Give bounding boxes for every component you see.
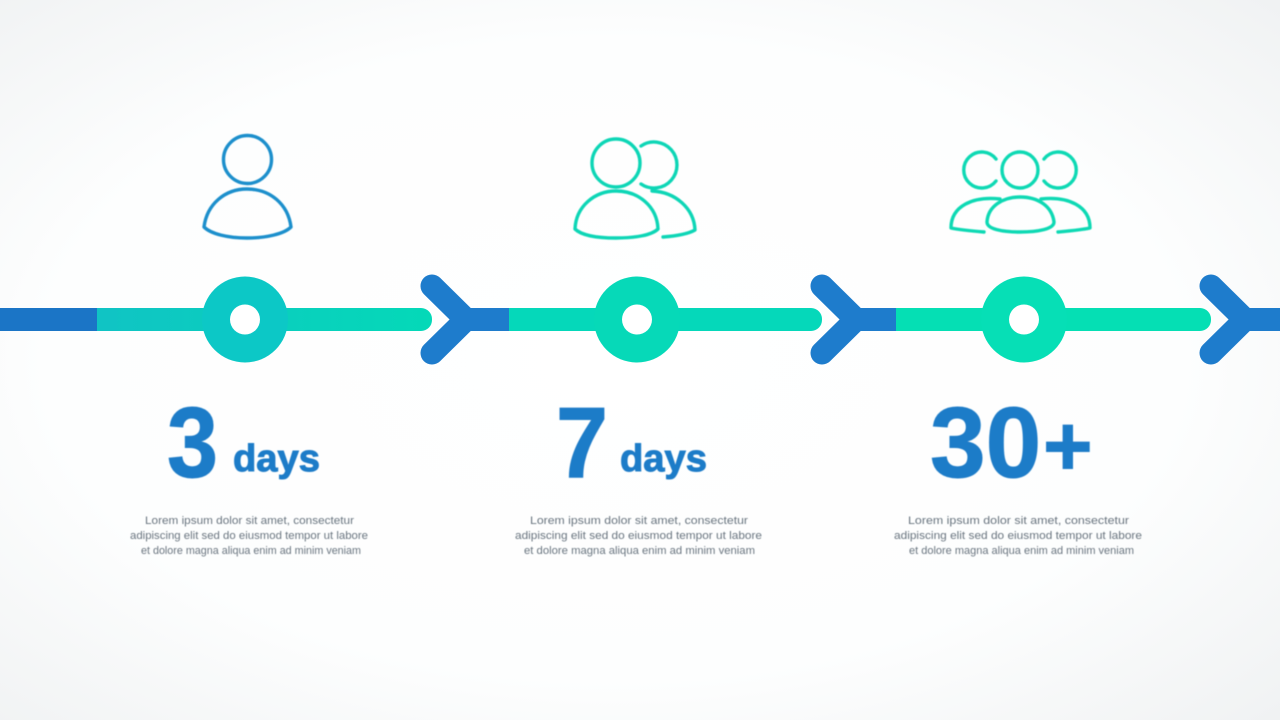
stat: 3 days: days — [233, 438, 320, 480]
text block one: Lorem ipsum dolor sit amet, consectetur — [145, 515, 354, 527]
stat: 3 days: 3 — [167, 387, 218, 499]
segment two — [509, 276, 822, 362]
text block two — [515, 515, 762, 557]
text block one — [130, 515, 368, 557]
text block three: Lorem ipsum dolor sit amet, consectetur — [908, 515, 1129, 527]
stat: 30+: + — [1043, 399, 1093, 494]
text block two: adipiscing elit sed do eiusmod tempor ut labore — [515, 530, 762, 542]
segment one — [97, 276, 432, 362]
icon: two people — [575, 139, 695, 238]
stat: 7 days: 7 — [556, 387, 608, 499]
icon: single person — [204, 136, 291, 238]
stat: 7 days: days — [620, 438, 707, 480]
timeline — [0, 276, 1280, 362]
text block one: et dolore magna aliqua enim ad minim veniam — [141, 545, 361, 557]
arrow two — [822, 286, 897, 353]
icon: three people — [951, 152, 1090, 232]
arrow three — [1211, 286, 1280, 353]
lead-in bar — [0, 308, 98, 331]
stat: 3 days — [167, 387, 320, 499]
text block two: Lorem ipsum dolor sit amet, consectetur — [530, 515, 748, 527]
stat: 30+ — [930, 387, 1093, 499]
stat: 7 days — [556, 387, 707, 499]
segment three — [896, 276, 1211, 362]
arrow one — [432, 286, 510, 353]
text block three: adipiscing elit sed do eiusmod tempor ut labore — [894, 530, 1142, 542]
text block three: et dolore magna aliqua enim ad minim veniam — [909, 545, 1134, 557]
text block three — [894, 515, 1142, 557]
text block two: et dolore magna aliqua enim ad minim veniam — [524, 545, 755, 557]
stat: 30+: 30 — [930, 387, 1041, 499]
text block one: adipiscing elit sed do eiusmod tempor ut labore — [130, 530, 368, 542]
